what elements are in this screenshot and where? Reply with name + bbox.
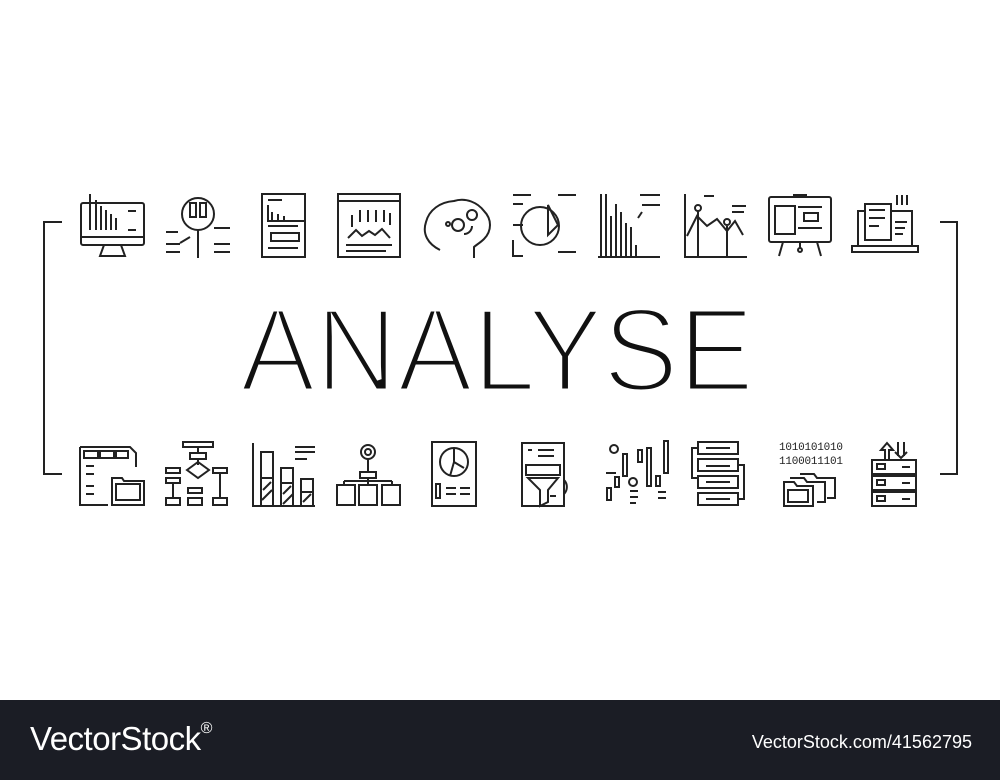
icon: presentation board bbox=[769, 195, 831, 256]
right bracket bbox=[940, 222, 957, 474]
icon: report doc bbox=[262, 194, 305, 257]
icon: binary folders bbox=[779, 442, 843, 506]
icon: brain gears bbox=[425, 200, 490, 258]
icon: line chart bbox=[685, 194, 747, 257]
icon: binary folders: 1010101010 bbox=[779, 442, 843, 454]
icon: funnel doc gear bbox=[522, 443, 567, 506]
footer brand: VectorStock® bbox=[30, 720, 212, 757]
title: ANALYSE bbox=[240, 284, 754, 417]
icon: table folder bbox=[80, 447, 144, 505]
icon: candlestick bbox=[606, 441, 668, 503]
icon: pie chart bbox=[513, 195, 576, 256]
footer url: VectorStock.com/41562795 bbox=[752, 732, 972, 752]
icon: stacked blocks bbox=[692, 442, 744, 505]
icon: gear org chart bbox=[337, 445, 400, 505]
icon: monitor bar chart bbox=[81, 194, 144, 256]
icon: hatched bars bbox=[253, 443, 315, 506]
icon: magnifier bbox=[166, 198, 230, 258]
icon: server arrows bbox=[872, 442, 916, 506]
icon: laptop document bbox=[852, 195, 918, 252]
icon: pie report bbox=[432, 442, 476, 506]
icon: bar chart bbox=[598, 194, 660, 257]
left bracket bbox=[44, 222, 62, 474]
icon: flowchart bbox=[166, 442, 227, 505]
icon: browser mountain bbox=[338, 194, 400, 257]
footer bbox=[0, 700, 1000, 780]
icon: binary folders: 1100011101 bbox=[779, 456, 843, 468]
